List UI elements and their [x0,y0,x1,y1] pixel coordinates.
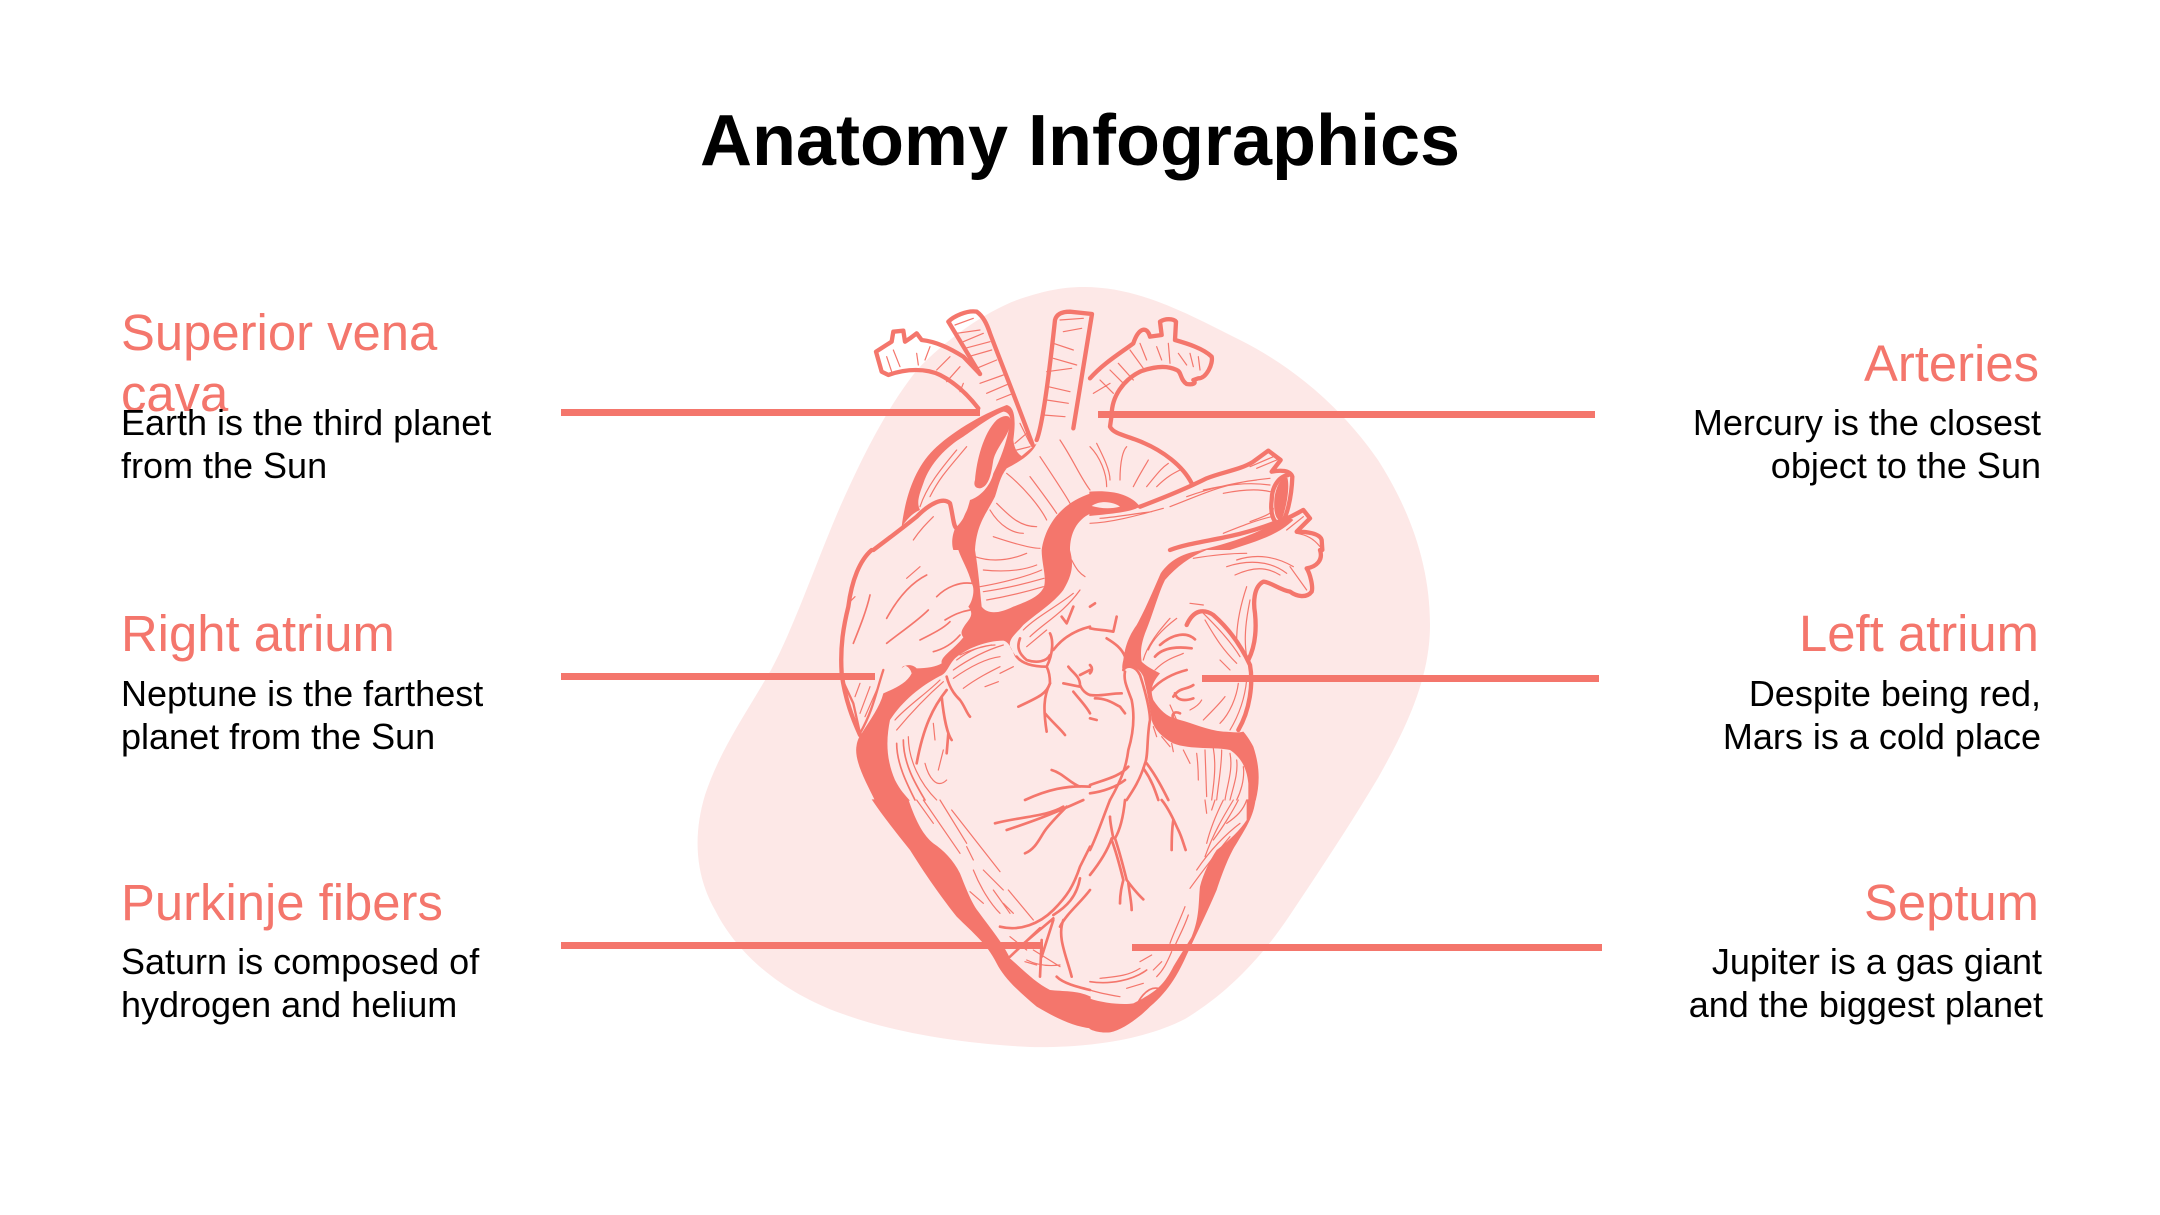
callout: Left atrium [1202,605,2041,757]
callout: Right atrium: planet from the Sun [121,716,435,757]
callout: Arteries: Arteries [1864,335,2039,392]
callout: Left atrium: Mars is a cold place [1723,716,2041,757]
heart: lower right ventricle and apex [1089,799,1256,1033]
heart: upper left vessels and right atrium [873,311,1092,550]
callout: Superior vena cava [121,304,980,486]
callout: Superior vena cava: from the Sun [121,445,327,486]
callout: Septum: Septum [1864,874,2039,931]
callout: Purkinje fibers [121,874,1043,1025]
callout: Arteries [1098,335,2041,486]
callout: Purkinje fibers: hydrogen and helium [121,984,457,1025]
callout: Superior vena cava: Earth is the third planet [121,402,491,443]
callout: Arteries: object to the Sun [1771,445,2041,486]
heart: left atrium and aorta wall [1090,550,1321,801]
callout: Left atrium: Left atrium [1799,605,2039,662]
callout: Septum: and the biggest planet [1689,984,2043,1025]
callout: Superior vena cava: Superior vena [121,304,438,361]
background blob [698,287,1430,1047]
callout: Purkinje fibers: Saturn is composed of [121,941,480,982]
callout: Septum: Jupiter is a gas giant [1712,941,2042,982]
callout: Right atrium: Right atrium [121,605,395,662]
heart illustration [841,311,1322,1033]
callout: Arteries: Mercury is the closest [1693,402,2041,443]
title: Anatomy Infographics [700,101,1460,181]
callout: Purkinje fibers: Purkinje fibers [121,874,443,931]
callout: Right atrium [121,605,875,757]
heart: upper right vessels and aorta [1089,319,1322,550]
callout: Left atrium: Despite being red, [1749,673,2041,714]
heart: left ventricle wall [872,799,1091,1028]
callout: Superior vena cava: cava [121,365,229,422]
callout: Septum [1132,874,2043,1025]
callout: Right atrium: Neptune is the farthest [121,673,483,714]
heart: chambers and central band [841,550,1090,801]
